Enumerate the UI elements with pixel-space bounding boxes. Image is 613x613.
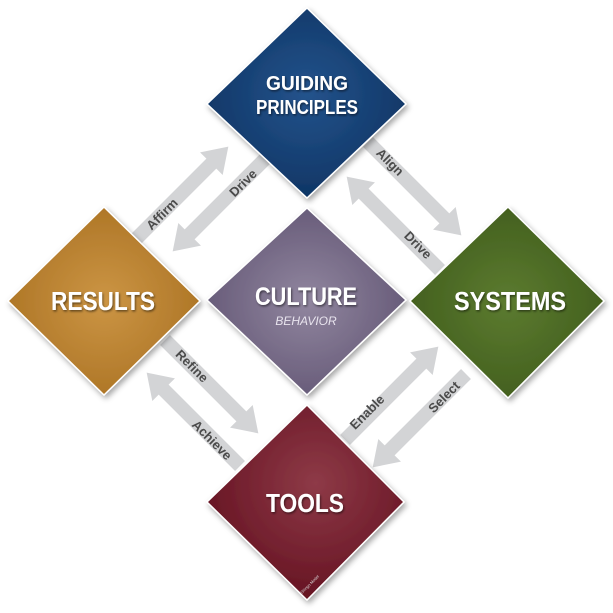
diamond: results xyxy=(8,207,200,395)
diamond: results: RESULTS xyxy=(51,286,155,316)
diamond: systems: SYSTEMS xyxy=(454,286,566,316)
arrow: refine xyxy=(154,329,270,445)
arrow: refine: Refine xyxy=(173,347,211,385)
diamond: tools: Shingo Model xyxy=(299,574,320,595)
arrow: achieve: Achieve xyxy=(189,417,235,463)
arrow: select xyxy=(361,363,477,479)
diamond: culture xyxy=(207,208,406,395)
arrow: select: Select xyxy=(425,378,463,416)
diamond: systems xyxy=(410,207,604,398)
arrow: drive (systems to principles) xyxy=(335,165,451,281)
arrow: achieve xyxy=(135,361,251,477)
diamond: guiding principles xyxy=(207,8,406,198)
diamond: culture: CULTURE xyxy=(255,283,357,311)
arrow: enable xyxy=(334,335,450,451)
diamond: guiding principles: PRINCIPLES xyxy=(256,97,358,119)
arrow: drive (principles to results): Drive xyxy=(226,166,260,200)
arrow: enable: Enable xyxy=(347,392,387,432)
arrow: align xyxy=(357,131,473,247)
arrow: drive (systems to principles): Drive xyxy=(401,228,435,262)
arrow: drive (principles to results) xyxy=(161,147,277,263)
arrow: align: Align xyxy=(373,145,407,179)
arrow: affirm xyxy=(124,135,240,251)
diamond: guiding principles: GUIDING xyxy=(266,73,348,95)
diamond: culture: BEHAVIOR xyxy=(275,314,337,328)
diamond: tools: TOOLS xyxy=(266,488,344,518)
diamond: tools xyxy=(207,405,404,600)
arrow: affirm: Affirm xyxy=(143,195,181,233)
